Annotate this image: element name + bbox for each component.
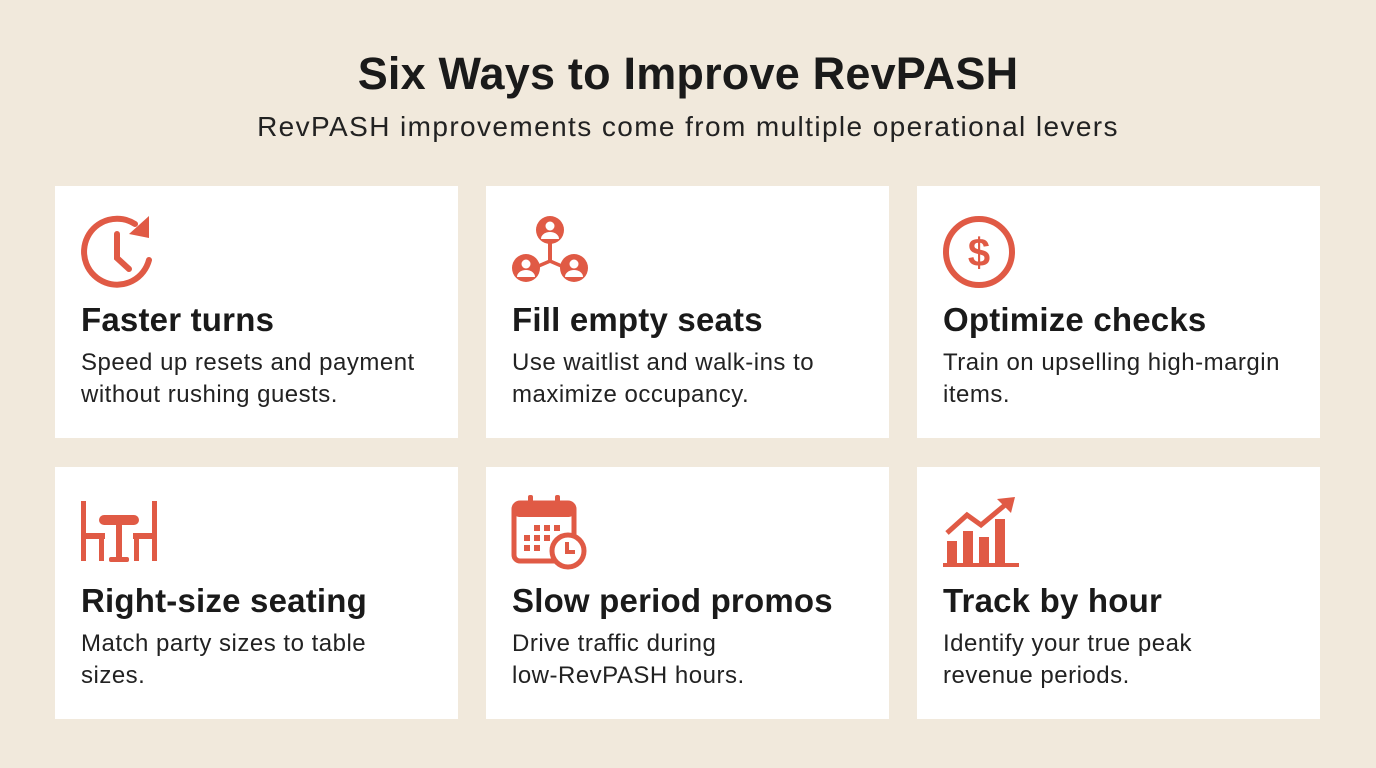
- heading: Fill empty seats: [512, 301, 763, 338]
- heading: Optimize checks: [943, 301, 1206, 338]
- text: Use waitlist and walk-ins to: [512, 349, 814, 376]
- text: revenue periods.: [943, 662, 1130, 689]
- heading: Right-size seating: [81, 582, 367, 619]
- text: sizes.: [81, 662, 145, 689]
- panel: slow period promos: [486, 467, 889, 719]
- panel: optimize checks: [917, 186, 1320, 438]
- panel: faster turns: [55, 186, 458, 438]
- text: Drive traffic during: [512, 630, 716, 657]
- icon: calendar clock: [512, 495, 586, 570]
- icon: people network: [512, 216, 588, 282]
- text: maximize occupancy.: [512, 381, 749, 408]
- text: Train on upselling high-margin: [943, 349, 1280, 376]
- text: [512, 630, 745, 689]
- heading: Track by hour: [943, 582, 1162, 619]
- icon: clock refresh: [81, 216, 152, 288]
- icon: dollar: [943, 216, 1015, 288]
- panel: fill empty seats: [486, 186, 889, 438]
- heading: Faster turns: [81, 301, 274, 338]
- panel: right-size seating: [55, 467, 458, 719]
- text: without rushing guests.: [81, 381, 338, 408]
- text: low-RevPASH hours.: [512, 662, 745, 689]
- subtitle: RevPASH improvements come from multiple operational levers: [257, 111, 1119, 142]
- text: Speed up resets and payment: [81, 349, 415, 376]
- title: Six Ways to Improve RevPASH: [358, 48, 1018, 99]
- icon: table chairs: [81, 501, 157, 562]
- text: [512, 349, 814, 408]
- text: Match party sizes to table: [81, 630, 366, 657]
- heading: Slow period promos: [512, 582, 833, 619]
- panel: track by hour: [917, 467, 1320, 719]
- text: Identify your true peak: [943, 630, 1192, 657]
- text: [943, 630, 1192, 689]
- text: [81, 349, 415, 408]
- text: [81, 630, 366, 689]
- icon: bar chart growth: [943, 497, 1019, 567]
- text: items.: [943, 381, 1010, 408]
- icon: dollar: $: [968, 231, 990, 275]
- text: [943, 349, 1280, 408]
